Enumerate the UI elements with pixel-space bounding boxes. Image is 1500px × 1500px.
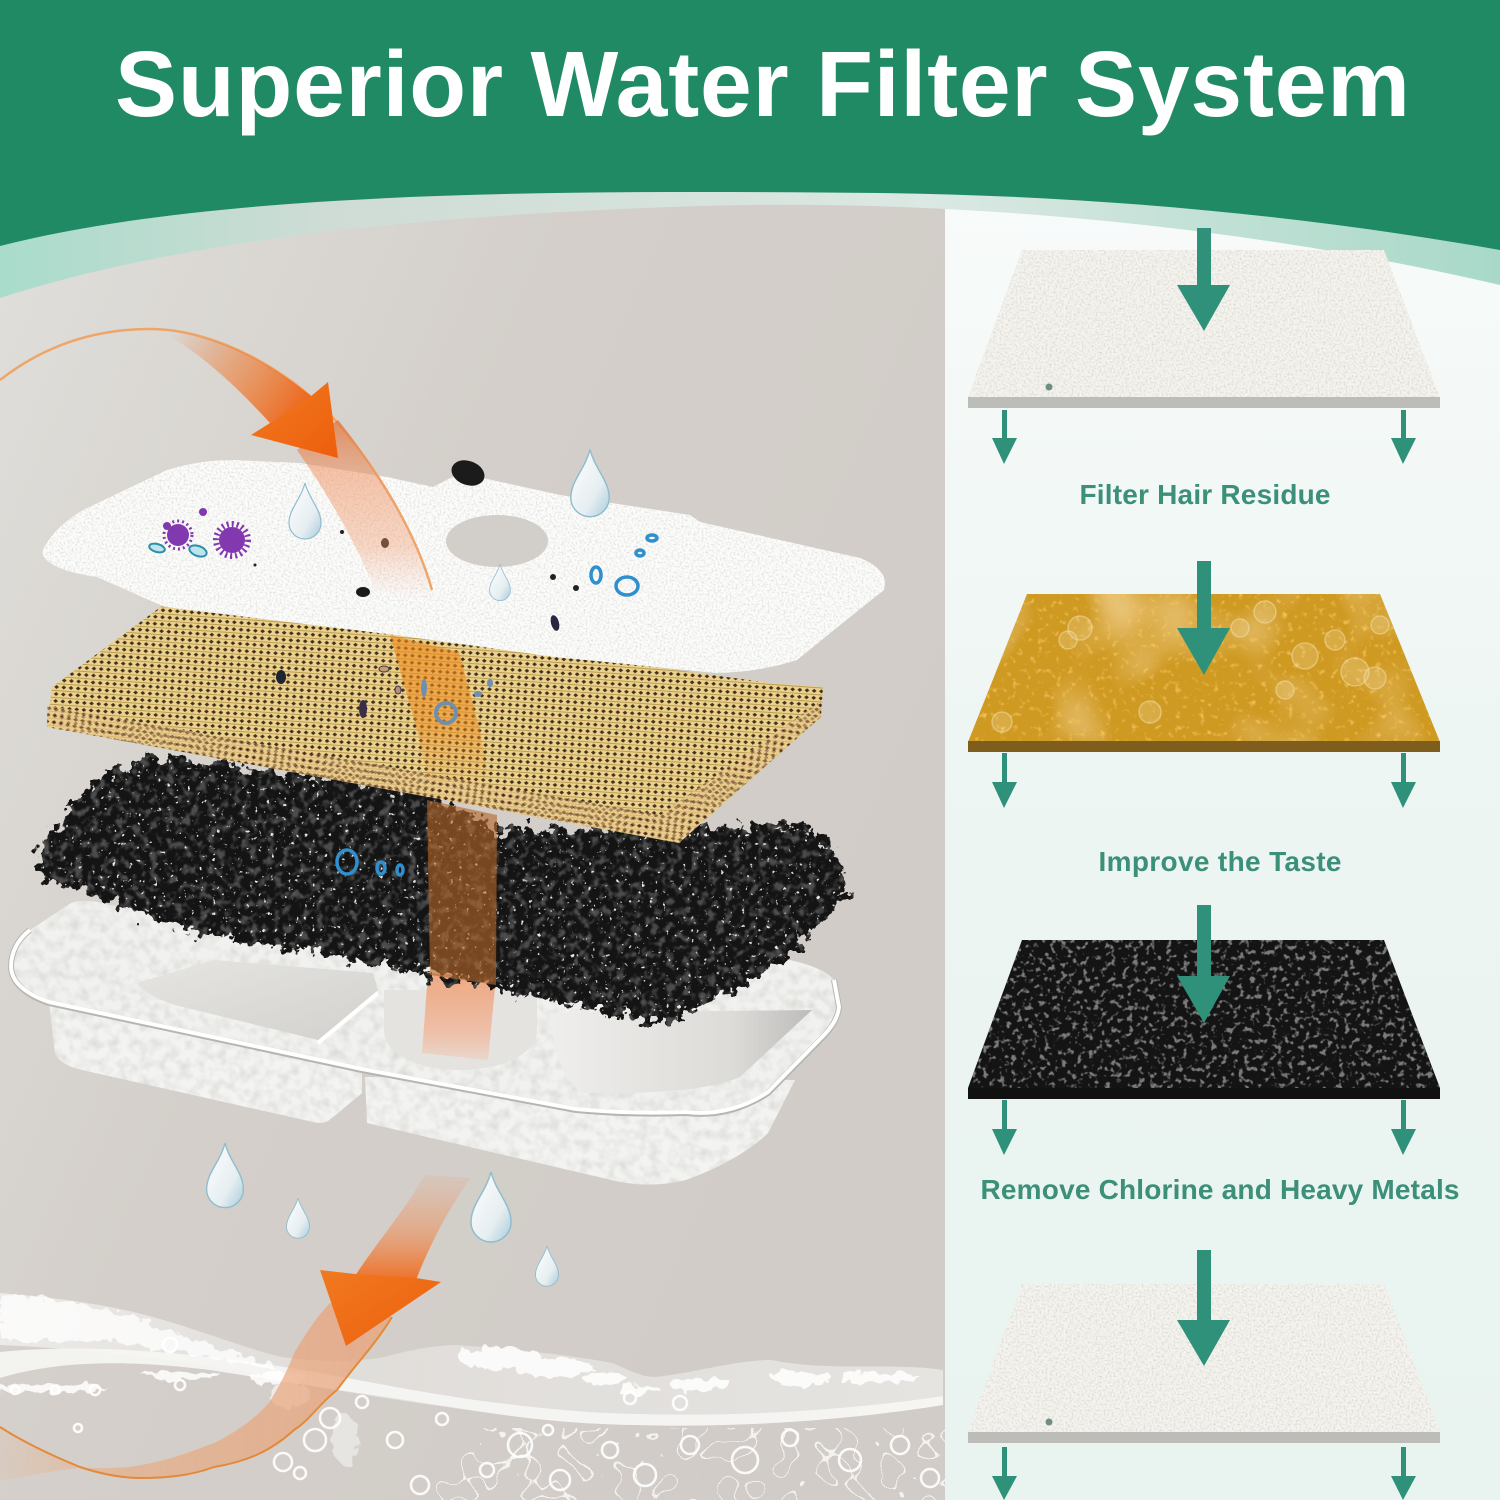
contaminants in mesh [276,666,493,723]
small arrow left [992,753,1017,808]
mesh lower edge rows [47,703,821,843]
center cylinder [384,990,537,1070]
left background panel [0,180,945,1500]
carbon sheet [968,940,1440,1088]
center divider [318,993,378,1043]
arrow body [355,1175,470,1280]
orange curved arrow: outflow [320,1175,470,1346]
orange curved arrow: inflow [0,329,436,610]
water body band [0,1293,943,1426]
sheet edge [968,741,1440,752]
contaminants in carbon [337,850,403,875]
large down arrow [1177,561,1230,675]
small arrow right [1391,753,1416,808]
light teal wave band [0,190,1500,298]
bacteria [163,508,248,556]
top white filter plate [42,456,885,673]
rim edge [11,930,839,1114]
caption: Improve the Taste [1098,846,1342,877]
small arrow left [992,1100,1017,1155]
main white streak [0,1349,943,1426]
sheet edge [968,1432,1440,1443]
orange beam over tray [422,973,496,1060]
arrowhead [251,382,338,458]
resin beads [992,601,1389,732]
filter sheet [968,1284,1440,1432]
beam below arrowhead [297,420,436,610]
small arrow left [992,1447,1017,1500]
orange swirl through water [0,1303,392,1480]
large down arrow [1177,1250,1230,1366]
small arrow right [1391,1447,1416,1500]
orange beam over carbon [427,800,497,985]
tray rim [11,901,839,1114]
small arrow right [1391,1100,1416,1155]
orange beam over mesh [390,635,490,790]
carbon layer [38,755,845,1025]
bubble texture [420,1428,945,1500]
tray compartment right [365,1077,795,1185]
caption: Remove Chlorine and Heavy Metals [980,1174,1460,1205]
water drops [207,450,609,1286]
large down arrow [1177,228,1230,331]
small arrow left [992,410,1017,464]
right background panel [945,180,1500,1500]
tray compartment left [49,1003,362,1123]
right cell [549,1010,812,1093]
arc body [160,331,312,423]
mesh layer [47,600,823,843]
water splash [0,1293,945,1500]
particles and rings [148,456,657,632]
resin sheet [968,594,1440,742]
sheet edge [968,397,1440,408]
large down arrow [1177,905,1230,1023]
green header banner [0,0,1500,250]
arrowhead [320,1270,441,1346]
center hole [446,515,548,567]
left cell [137,960,378,1040]
small arrow right [1391,410,1416,464]
caption: Filter Hair Residue [1080,479,1330,510]
step 4: final filter [968,1250,1440,1500]
bubbles [11,1338,939,1494]
white foam highlights [0,1295,920,1466]
step 2: improve the taste [968,561,1440,877]
filter sheet [968,250,1440,397]
step 3: remove chlorine and heavy metals [968,905,1460,1205]
sheet edge [968,1088,1440,1099]
thin arc line [0,329,432,590]
step 1: filter hair residue [968,228,1440,510]
tray layer [11,901,839,1185]
title: Superior Water Filter System [115,32,1410,136]
mesh surface [47,600,823,843]
